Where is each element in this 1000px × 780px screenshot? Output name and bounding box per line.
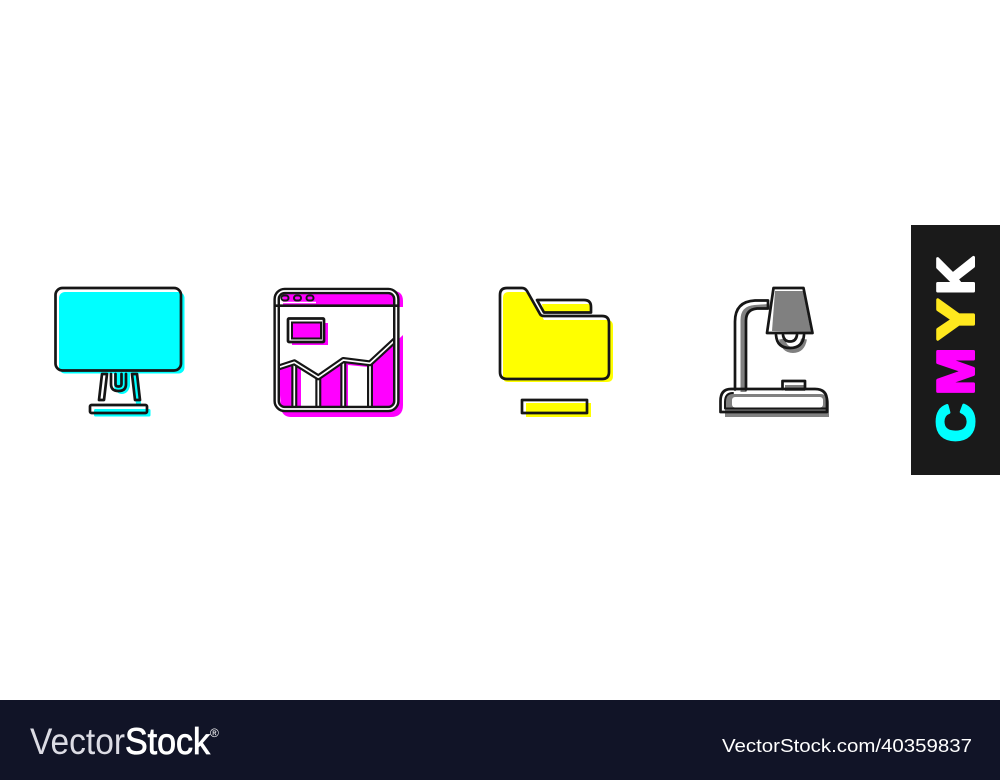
- icon: magenta browser window with area chart: [275, 291, 403, 417]
- CMYK label: M: [927, 348, 985, 395]
- icon: cyan monitor: [56, 288, 184, 416]
- CMYK label: C: [927, 404, 985, 442]
- icon: grey desk lamp: [720, 288, 829, 417]
- VectorStock logo: Stock: [125, 721, 210, 762]
- icon: yellow folder: [500, 288, 613, 417]
- CMYK label: [927, 256, 986, 442]
- panel: CMYK badge: [911, 225, 1000, 475]
- CMYK label: Y: [928, 299, 985, 340]
- VectorStock logo: [30, 721, 210, 762]
- footer bar: [0, 700, 1000, 780]
- registered mark: ®: [210, 726, 219, 740]
- VectorStock logo: Vector: [30, 721, 125, 762]
- image id: VectorStock.com/40359837: [722, 736, 972, 756]
- CMYK label: K: [928, 256, 986, 294]
